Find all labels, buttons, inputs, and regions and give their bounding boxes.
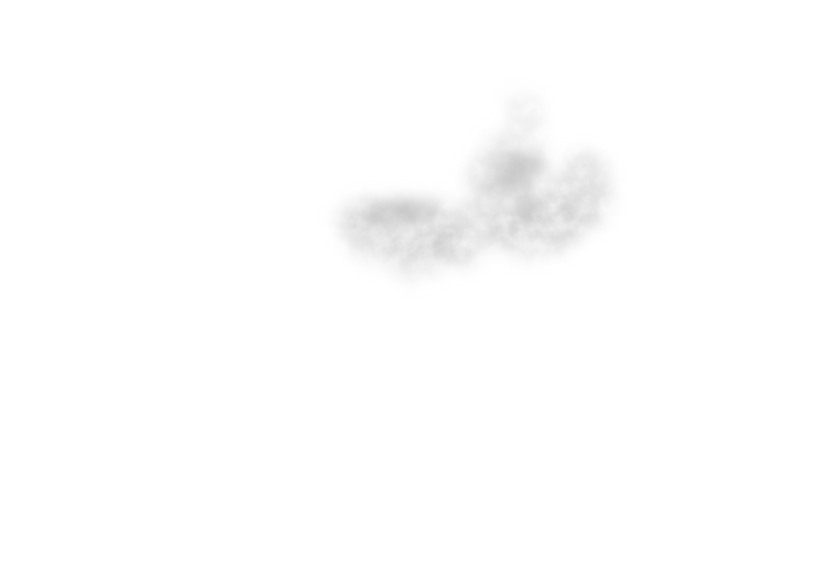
- middle bridge: [426, 146, 576, 260]
- darker smoke patches: [362, 156, 547, 224]
- left lobe: [336, 194, 470, 280]
- right lobe: [524, 152, 612, 248]
- top wisp: [483, 100, 547, 159]
- cloud body: [336, 100, 612, 280]
